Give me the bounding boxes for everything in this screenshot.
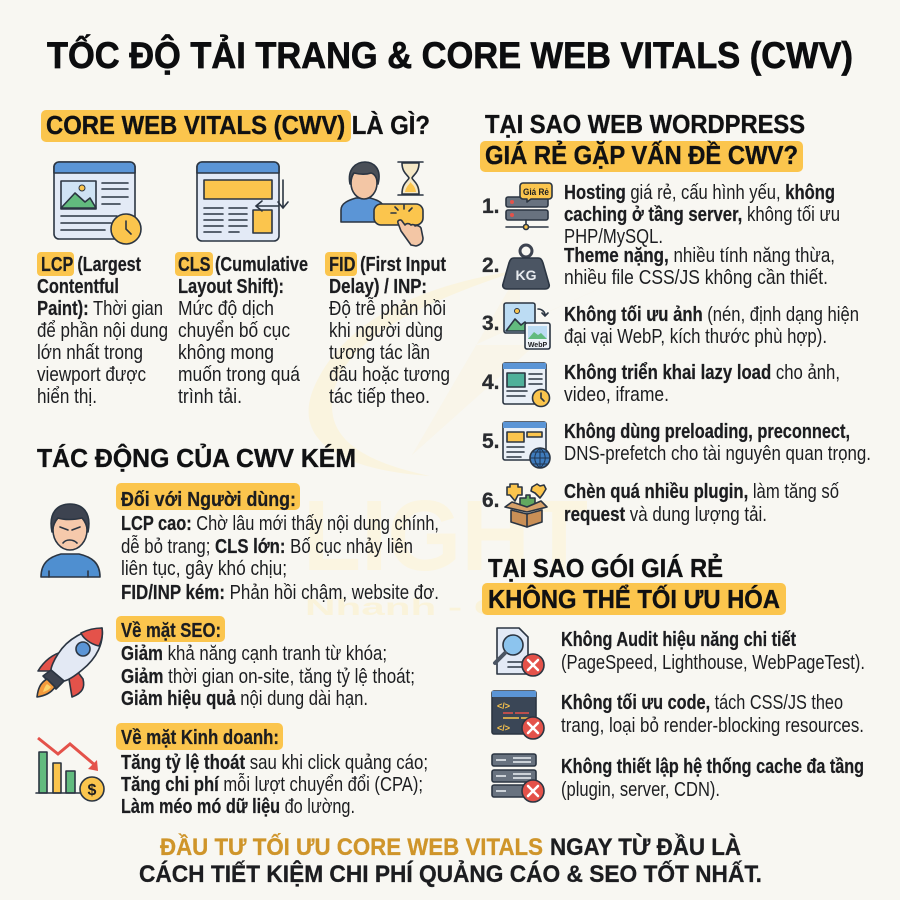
definition: LCP: hiển thị. xyxy=(37,385,97,408)
subsection: SEO impact: Về mặt SEO: xyxy=(121,619,221,642)
reason 5: preloading: 5. xyxy=(482,430,500,453)
footer call to action: CÁCH TIẾT KIỆM CHI PHÍ QUẢNG CÁO & SEO TỐT NHẤT. xyxy=(139,859,762,888)
subsection: user impact xyxy=(116,483,439,604)
heading: why wordpress: GIÁ RẺ GẶP VẤN ĐỀ CWV? xyxy=(485,140,798,170)
definition: LCP: Paint): Thời gian xyxy=(37,297,163,320)
definition: CLS: muốn trong quá xyxy=(178,363,301,386)
icon: falling chart with coin: $ xyxy=(88,782,97,799)
definition: LCP: Contentful xyxy=(37,275,119,298)
definition: CLS: trình tải. xyxy=(178,385,242,408)
heading: why wordpress xyxy=(480,111,805,172)
subsection: business impact: Tăng tỷ lệ thoát sau khi click quảng cáo; xyxy=(121,751,428,774)
icon: angry user xyxy=(41,504,100,577)
item: no code optimization: Không tối ưu code, tách CSS/JS theo xyxy=(561,691,843,714)
definition: FID / INP: đầu hoặc tương xyxy=(329,363,450,386)
item: no multi-layer cache: (plugin, server, CDN). xyxy=(561,778,720,801)
subsection: user impact: liên tục, gây khó chịu; xyxy=(121,557,287,580)
reason 5: preloading xyxy=(482,420,871,468)
reason 6: plugins: 6. xyxy=(482,489,500,512)
reason 6: plugins: request và dung lượng tải. xyxy=(564,503,767,526)
panel: core web vitals definition xyxy=(37,110,450,408)
reason 1: hosting: Giá Rẻ xyxy=(523,187,549,198)
definition: FID / INP xyxy=(325,252,450,408)
panel: impact of poor CWV xyxy=(36,443,439,818)
definition: LCP: viewport được xyxy=(37,363,146,386)
subsection: business impact: Về mặt Kinh doanh: xyxy=(121,726,279,749)
icon: rocket xyxy=(37,628,102,697)
definition: FID / INP: tương tác lần xyxy=(329,341,430,364)
subsection: SEO impact: Giảm khả năng cạnh tranh từ khóa; xyxy=(121,642,387,665)
heading: core web vitals: CORE WEB VITALS (CWV)LÀ GÌ? xyxy=(46,111,430,140)
icon: LCP browser with clock xyxy=(54,162,141,244)
reason 3: images xyxy=(482,303,859,349)
watermark logo: Nhanh - Chuẩn xyxy=(305,594,605,620)
icon: falling chart with coin xyxy=(36,738,104,801)
footer call to action: NGAY TỪ ĐẦU LÀ xyxy=(550,833,741,861)
reason 4: lazy load: video, iframe. xyxy=(564,383,669,406)
reason 2: heavy theme: nhiều file CSS/JS không cần thiết. xyxy=(564,266,828,289)
reason 3: images: 3. xyxy=(482,312,500,335)
subsection: business impact: Làm méo mó dữ liệu đo lường. xyxy=(121,795,355,818)
subsection: SEO impact xyxy=(116,616,415,710)
subsection: SEO impact: Giảm thời gian on-site, tăng tỷ lệ thoát; xyxy=(121,665,415,688)
subsection: user impact: FID/INP kém: Phản hồi chậm, website đơ. xyxy=(121,581,439,604)
subsection: user impact: LCP cao: Chờ lâu mới thấy nội dung chính, xyxy=(121,512,439,535)
definition: LCP: LCP (Largest xyxy=(41,253,141,276)
footer call to action: ĐẦU TƯ TỐI ƯU CORE WEB VITALS xyxy=(160,833,543,861)
heading: cheap package: TẠI SAO GÓI GIÁ RẺ xyxy=(488,553,723,583)
definition: FID / INP: FID (First Input xyxy=(329,253,446,276)
reason 4: lazy load: Không triển khai lazy load cho ảnh, xyxy=(564,361,840,384)
reason 4: lazy load xyxy=(482,361,840,406)
definition: FID / INP: Độ trễ phản hồi xyxy=(329,297,446,320)
reason 1: hosting: caching ở tầng server, không tối ưu xyxy=(564,203,840,226)
reason 6: plugins xyxy=(482,480,839,527)
reason 4: lazy load: 4. xyxy=(482,371,500,394)
reason 6: plugins: Chèn quá nhiều plugin, làm tăng số xyxy=(564,480,839,503)
item: no multi-layer cache xyxy=(492,754,864,802)
reason 3: images: WebP xyxy=(528,342,547,349)
reason 2: heavy theme: KG xyxy=(516,267,537,283)
definition: CLS xyxy=(175,252,308,408)
subsection: user impact: Đối với Người dùng: xyxy=(121,488,296,511)
reason 2: heavy theme: 2. xyxy=(482,254,500,277)
icon: CLS shifting layout xyxy=(197,162,288,241)
item: no code optimization xyxy=(492,691,864,739)
subsection: SEO impact: Giảm hiệu quả nội dung dài hạn. xyxy=(121,687,368,710)
subsection: business impact xyxy=(116,723,428,818)
definition: CLS: Mức độ dịch xyxy=(178,297,274,320)
reason 2: heavy theme: Theme nặng, nhiều tính năng thừa, xyxy=(564,244,835,267)
definition: CLS: Layout Shift): xyxy=(178,275,284,298)
definition: CLS: không mong xyxy=(178,341,274,364)
footer call to action xyxy=(139,833,762,888)
panel: why cheap packages cannot optimize xyxy=(482,553,865,802)
reason 3: images: Không tối ưu ảnh (nén, định dạng hiện xyxy=(564,303,859,326)
watermark logo: LIGHT xyxy=(303,480,588,592)
reason 1: hosting xyxy=(482,181,840,248)
item: no audit: Không Audit hiệu năng chi tiết xyxy=(561,628,796,651)
icon: FID person clicking button xyxy=(341,162,423,246)
heading: why wordpress: TẠI SAO WEB WORDPRESS xyxy=(485,111,805,139)
definition: CLS: chuyển bố cục xyxy=(178,319,290,342)
reason 1: hosting: 1. xyxy=(482,195,500,218)
heading: cheap package: KHÔNG THỂ TỐI ƯU HÓA xyxy=(488,584,780,614)
panel: why cheap WordPress sites have CWV issues xyxy=(480,111,871,527)
subsection: business impact: Tăng chi phí mỗi lượt chuyển đổi (CPA); xyxy=(121,773,423,796)
item: no code optimization: </> xyxy=(497,701,510,711)
reason 2: heavy theme xyxy=(482,244,835,289)
definition: FID / INP: Delay) / INP: xyxy=(329,275,427,298)
watermark logo xyxy=(303,270,640,620)
item: no code optimization: </> xyxy=(497,723,510,733)
definition: LCP: lớn nhất trong xyxy=(37,341,143,364)
definition: CLS: CLS (Cumulative xyxy=(178,253,308,276)
heading: impact: TÁC ĐỘNG CỦA CWV KÉM xyxy=(37,443,356,473)
reason 3: images: đại vại WebP, kích thước phù hợp). xyxy=(564,325,827,348)
definition: LCP: để phần nội dung xyxy=(37,319,168,342)
subsection: user impact: dễ bỏ trang; CLS lớn: Bố cục nhảy liên xyxy=(121,535,413,558)
reason 1: hosting: Hosting giá rẻ, cấu hình yếu, không xyxy=(564,181,835,204)
definition: FID / INP: tác tiếp theo. xyxy=(329,385,430,408)
title: TỐC ĐỘ TẢI TRANG & CORE WEB VITALS (CWV) xyxy=(47,34,853,76)
definition: FID / INP: khi người dùng xyxy=(329,319,443,342)
definition: LCP xyxy=(37,252,168,408)
item: no audit xyxy=(495,628,865,676)
heading: cheap package xyxy=(482,553,786,615)
reason 1: hosting: PHP/MySQL. xyxy=(564,225,663,248)
